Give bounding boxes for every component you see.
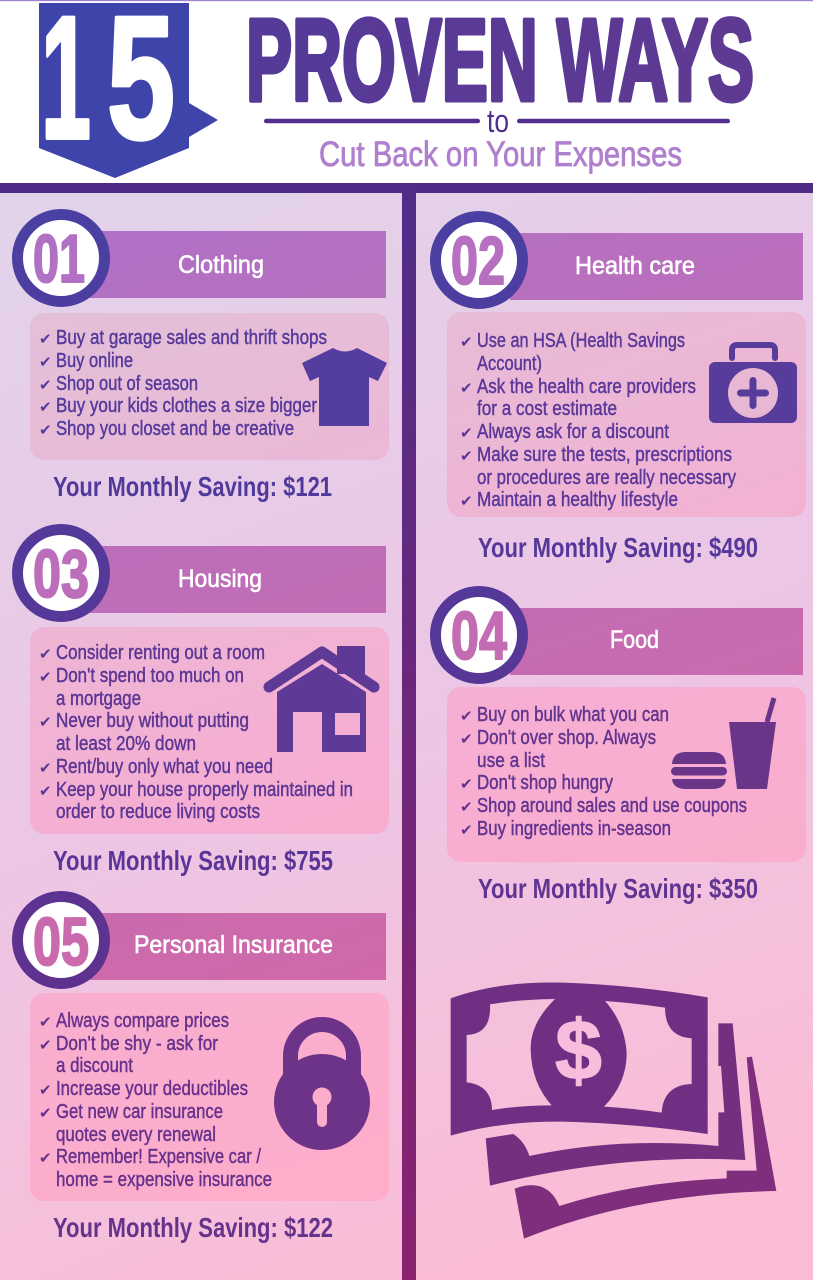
tip list: housing: ✔ xyxy=(39,668,52,686)
tip list: food: Buy ingredients in-season xyxy=(477,818,671,840)
tip list: clothing: Buy at garage sales and thrift shops xyxy=(56,327,327,349)
tip list: housing: ✔ xyxy=(39,759,52,777)
tip list: health care: for a cost estimate xyxy=(477,398,617,420)
tip list: food: use a list xyxy=(477,750,545,772)
tip list: food: ✔ xyxy=(460,798,473,816)
panel: clothing tips xyxy=(30,313,389,460)
tip list: health care: ✔ xyxy=(460,492,473,510)
heading bar: health care: 02 xyxy=(451,223,505,299)
tip list: housing xyxy=(39,642,353,823)
title connector: to xyxy=(264,103,730,139)
tip list: clothing: Shop you closet and be creative xyxy=(56,418,294,440)
section 05: personal insurance xyxy=(18,896,389,1243)
saving: clothing: Your Monthly Saving: $121 xyxy=(53,471,332,502)
tip list: health care: ✔ xyxy=(460,379,473,397)
tip list: housing: ✔ xyxy=(39,713,52,731)
heading bar: food: 04 xyxy=(451,598,507,674)
tip list: clothing: ✔ xyxy=(39,353,52,371)
tip list: housing: Consider renting out a room xyxy=(56,642,265,664)
heading bar: housing: 03 xyxy=(33,536,89,612)
tip list: food: ✔ xyxy=(460,707,473,725)
tip list: insurance: Remember! Expensive car / xyxy=(56,1146,261,1168)
tip list: clothing: ✔ xyxy=(39,330,52,348)
tip list: housing: ✔ xyxy=(39,645,52,663)
tip list: food: Don't shop hungry xyxy=(477,772,613,794)
heading bar: clothing: Clothing xyxy=(178,251,264,279)
tip list: insurance: Get new car insurance xyxy=(56,1101,223,1123)
tip list: food: Buy on bulk what you can xyxy=(477,704,669,726)
saving: housing: Your Monthly Saving: $755 xyxy=(53,845,333,876)
tip list: insurance: Always compare prices xyxy=(56,1010,229,1032)
section 03: housing xyxy=(18,530,389,876)
heading bar: health care xyxy=(436,216,803,304)
tip list: health care: ✔ xyxy=(460,424,473,442)
heading bar: personal insurance: 05 xyxy=(33,904,89,980)
panel: insurance tips xyxy=(30,993,389,1201)
tip list: health care: or procedures are really necessary xyxy=(477,467,736,489)
panel: housing tips xyxy=(30,627,389,834)
tip list: health care: Use an HSA (Health Savings xyxy=(477,330,685,352)
tip list: housing: at least 20% down xyxy=(56,733,196,755)
tip list: health care: ✔ xyxy=(460,447,473,465)
tip list: housing: Rent/buy only what you need xyxy=(56,756,273,778)
tip list: food xyxy=(460,704,747,840)
tip list: food: Shop around sales and use coupons xyxy=(477,795,747,817)
icon: first aid kit xyxy=(709,345,797,423)
tip list: food: ✔ xyxy=(460,730,473,748)
title connector: to: to xyxy=(487,103,509,139)
tip list: insurance: Don't be shy - ask for xyxy=(56,1033,218,1055)
tip list: housing: ✔ xyxy=(39,782,52,800)
tip list: food: Don't over shop. Always xyxy=(477,727,656,749)
icon: burger and drink xyxy=(671,698,776,789)
badge: 15 xyxy=(39,0,218,178)
tip list: health care: Maintain a healthy lifestyle xyxy=(477,489,678,511)
tip list: insurance: ✔ xyxy=(39,1081,52,1099)
tip list: housing: Never buy without putting xyxy=(56,710,249,732)
tip list: health care: Ask the health care providers xyxy=(477,376,696,398)
tip list: clothing xyxy=(39,327,327,440)
heading bar: clothing: 01 xyxy=(33,221,85,297)
icon: stack of dollar bills: $ xyxy=(555,1003,602,1097)
heading bar: housing: Housing xyxy=(178,565,262,593)
tip list: insurance: home = expensive insurance xyxy=(56,1169,272,1191)
tip list: insurance: ✔ xyxy=(39,1013,52,1031)
section 02: health care xyxy=(436,216,806,563)
icon: t-shirt xyxy=(302,348,387,426)
subtitle: Cut Back on Your Expenses xyxy=(319,135,682,174)
section 04: food xyxy=(436,592,806,904)
tip list: housing: Don't spend too much on xyxy=(56,665,244,687)
heading bar: food xyxy=(436,592,803,678)
panel: food tips xyxy=(447,687,806,862)
heading bar: health care: Health care xyxy=(575,252,695,280)
tip list: clothing: ✔ xyxy=(39,376,52,394)
tip list: housing: a mortgage xyxy=(56,688,141,710)
tip list: health care: Always ask for a discount xyxy=(477,421,669,443)
tip list: clothing: ✔ xyxy=(39,398,52,416)
tip list: health care: Make sure the tests, prescriptions xyxy=(477,444,732,466)
tip list: insurance: ✔ xyxy=(39,1036,52,1054)
tip list: food: ✔ xyxy=(460,775,473,793)
icon: stack of dollar bills xyxy=(451,982,776,1239)
heading bar: clothing xyxy=(18,214,386,302)
header band xyxy=(0,0,813,183)
tip list: health care: Account) xyxy=(477,353,542,375)
icon: padlock xyxy=(274,1024,370,1150)
heading bar: personal insurance: Personal Insurance xyxy=(134,931,333,959)
tip list: housing: Keep your house properly maintained in xyxy=(56,779,353,801)
tip list: insurance: ✔ xyxy=(39,1104,52,1122)
panel: health care tips xyxy=(447,312,806,517)
tip list: insurance: Increase your deductibles xyxy=(56,1078,248,1100)
heading bar: housing xyxy=(18,530,386,616)
saving: insurance: Your Monthly Saving: $122 xyxy=(53,1212,333,1243)
tip list: insurance: quotes every renewal xyxy=(56,1124,216,1146)
tip list: insurance xyxy=(39,1010,272,1191)
tip list: clothing: Shop out of season xyxy=(56,373,198,395)
tip list: insurance: a discount xyxy=(56,1055,133,1077)
section 01: clothing xyxy=(18,214,389,502)
tip list: insurance: ✔ xyxy=(39,1149,52,1167)
heading bar: food: Food xyxy=(610,626,659,654)
heading bar: personal insurance xyxy=(18,896,386,984)
tip list: health care xyxy=(460,330,736,511)
tip list: food: ✔ xyxy=(460,821,473,839)
icon: house xyxy=(269,646,374,752)
tip list: clothing: Buy your kids clothes a size bigger xyxy=(56,395,317,417)
tip list: clothing: ✔ xyxy=(39,421,52,439)
tip list: housing: order to reduce living costs xyxy=(56,801,260,823)
tip list: clothing: Buy online xyxy=(56,350,133,372)
tip list: health care: ✔ xyxy=(460,333,473,351)
